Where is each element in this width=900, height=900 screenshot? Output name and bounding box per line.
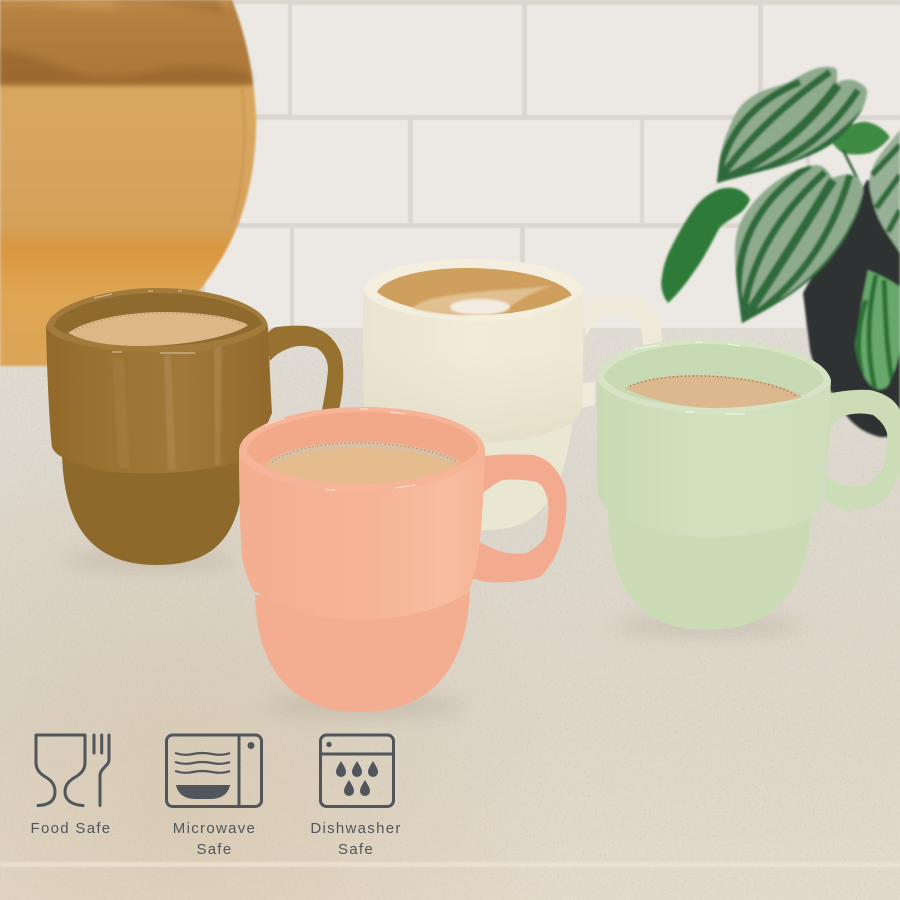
- upper body: [597, 377, 831, 537]
- label: dishwasher safe: Safe: [338, 841, 374, 858]
- icon: food safe: [36, 735, 109, 806]
- rim: [363, 259, 583, 321]
- coffee: [263, 442, 462, 484]
- lower striped leaf: [734, 164, 865, 324]
- right striped leaf: [868, 130, 900, 254]
- handle: [470, 454, 566, 582]
- handle: [266, 326, 343, 410]
- handle: [585, 295, 662, 345]
- plant in dark pot: [661, 60, 900, 437]
- wooden cutting board: [0, 0, 256, 366]
- label: dishwasher safe: Dishwasher: [310, 820, 402, 837]
- lower body: [255, 590, 470, 712]
- label: food safe: Food Safe: [31, 820, 111, 837]
- shade on cream body: [363, 290, 583, 443]
- upper body: [363, 290, 583, 443]
- dark green leaf: [661, 188, 750, 303]
- rim highlights: [265, 409, 415, 490]
- rim highlights: [634, 342, 745, 414]
- rim: [597, 339, 831, 414]
- interior: [604, 344, 824, 408]
- pink mug: [239, 407, 566, 712]
- icon: microwave safe: [166, 735, 262, 806]
- bottom striped leaf: [854, 268, 900, 392]
- icon: dishwasher safe: [320, 735, 394, 806]
- countertop: [0, 329, 900, 900]
- rim: [46, 288, 268, 352]
- brown mug: [46, 288, 343, 565]
- handle: [825, 390, 900, 510]
- rim: [239, 407, 485, 492]
- tiled wall background: [0, 0, 900, 340]
- handle lower nub: [580, 382, 595, 408]
- lower body: [480, 420, 573, 530]
- interior: [247, 412, 478, 484]
- plant pot: [803, 180, 900, 437]
- upper striped leaf: [715, 66, 868, 184]
- green mug: [597, 339, 900, 630]
- upper body: [46, 327, 272, 473]
- coffee: [377, 268, 572, 315]
- rim highlights: [94, 291, 195, 353]
- stem: [843, 150, 858, 180]
- upper body: [239, 450, 485, 620]
- small background leaf: [830, 122, 890, 154]
- latte art: [412, 286, 552, 315]
- lower body: [62, 455, 245, 565]
- foam: [75, 313, 243, 331]
- interior: [54, 293, 262, 346]
- label: microwave safe: Safe: [196, 841, 233, 858]
- cream mug: [363, 259, 662, 530]
- coffee: [68, 312, 248, 346]
- glaze highlights: [112, 342, 222, 470]
- shadows under mugs: [65, 551, 803, 716]
- foam: [630, 376, 796, 396]
- lower body: [608, 510, 811, 630]
- coffee: [625, 375, 802, 408]
- foam: [270, 445, 455, 463]
- label: microwave safe: Microwave: [173, 820, 256, 837]
